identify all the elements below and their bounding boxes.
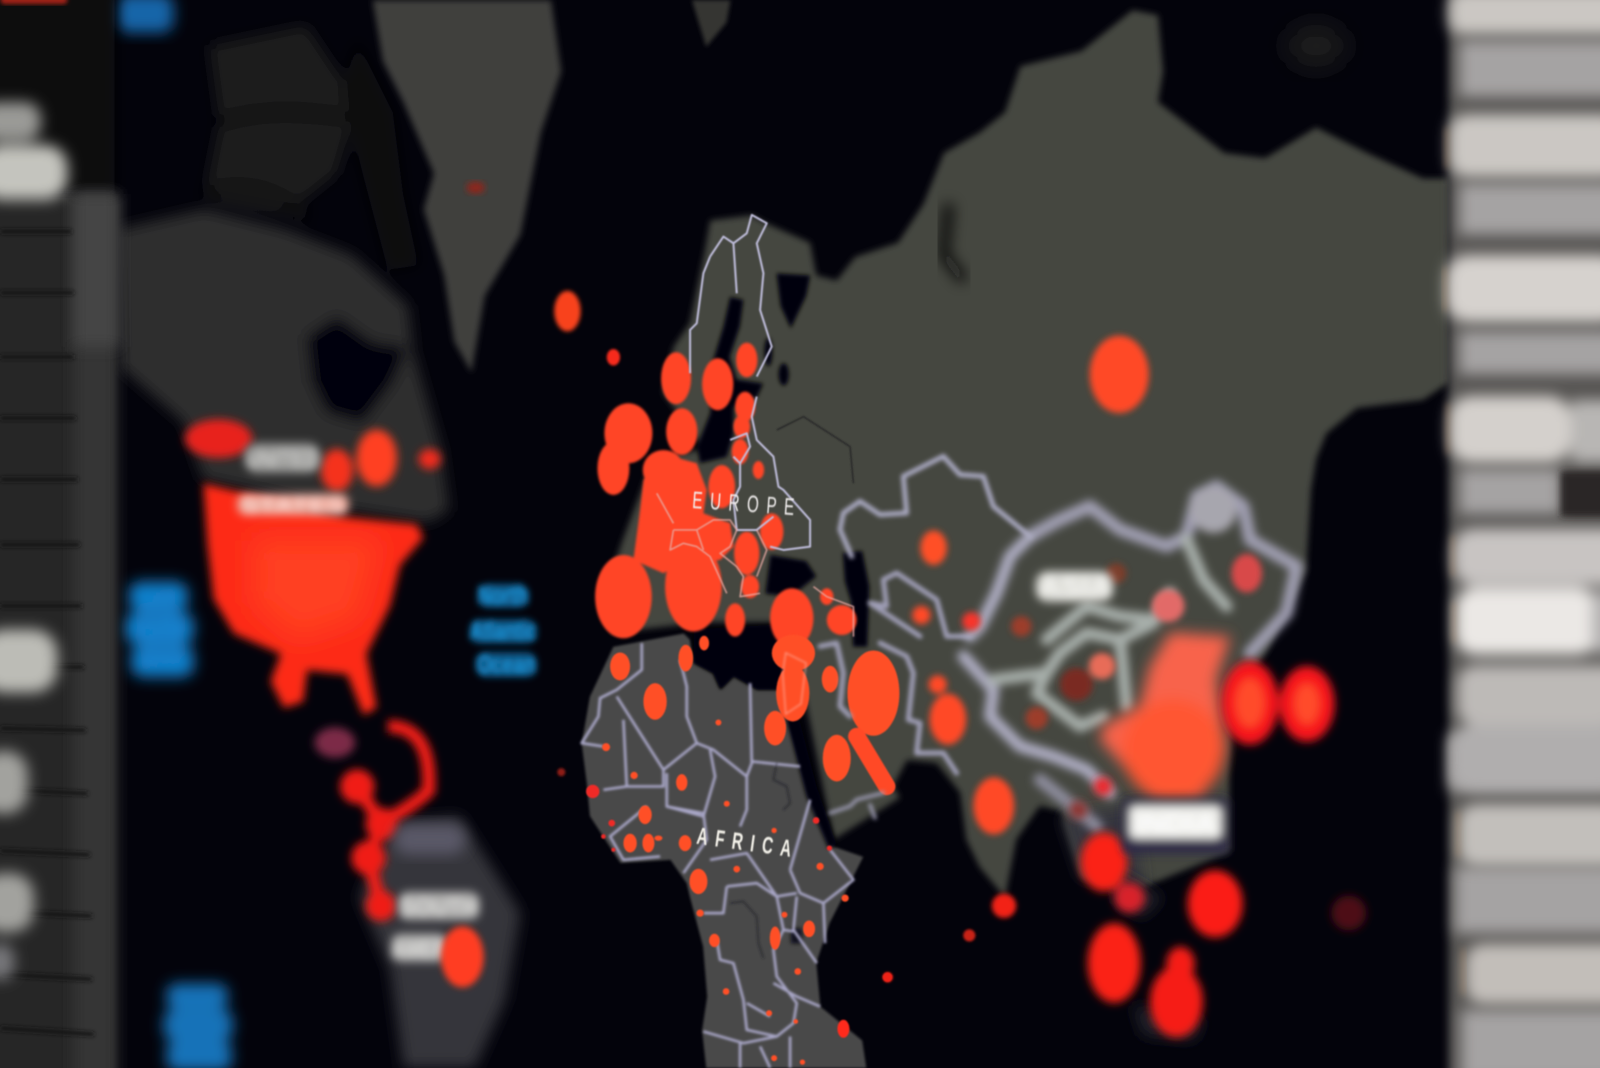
red case bubbles: north america — [185, 419, 441, 921]
red case bubbles: east and southeast asia — [1069, 661, 1366, 1037]
label: Atlantic Ocean in blue: Atlantic — [470, 618, 537, 646]
seas cut from the land — [694, 273, 869, 944]
blurred right rows, bright — [1446, 0, 1600, 1005]
faint bubble over greenland — [466, 182, 485, 194]
label: Atlantic Ocean in blue: Ocean — [477, 651, 536, 679]
red case bubbles: europe — [595, 343, 857, 648]
label: Europe: EUROPE — [691, 488, 803, 522]
red bubble: iceland — [554, 291, 581, 332]
label: Pacific Ocean in blue: North — [131, 580, 187, 610]
label: white tag over southeast asia — [1122, 798, 1229, 854]
label: Pacific Ocean in blue: Pacific — [125, 615, 192, 645]
land: africa — [582, 633, 866, 1068]
label: South America: AMER — [392, 936, 447, 963]
dark cut-out in right panel — [1561, 471, 1600, 516]
country borders: africa — [582, 643, 853, 1068]
list row lines — [0, 232, 94, 1034]
label: Atlantic Ocean in blue: North — [478, 582, 529, 610]
label: Atlantic Ocean in blue — [470, 582, 537, 679]
blurred right rows, dim — [1449, 41, 1600, 1068]
right panel: blurred data column — [1445, 0, 1600, 1068]
label: white tag over southeast asia: INDIA — [1135, 808, 1216, 838]
label: Africa: AFRICA — [695, 823, 801, 864]
label: Pacific Ocean in blue: Ocean — [133, 647, 192, 677]
red bubble: brazil — [441, 926, 484, 987]
red case bubbles: asia — [912, 336, 1262, 834]
land: south america — [359, 816, 521, 1068]
red case bubbles: africa and middle east — [586, 635, 899, 1065]
country borders: central asia, out of focus — [820, 456, 1030, 818]
label: Asia: ASIA — [1039, 572, 1112, 604]
label: United States — [237, 443, 349, 518]
label: Pacific Ocean in blue — [125, 580, 194, 677]
orange fringe on right rows — [1445, 128, 1463, 995]
land: scandinavia, russia and asia — [602, 10, 1449, 898]
blurred white list labels — [0, 102, 68, 980]
blue label top left — [117, 0, 174, 33]
china and indian borders, most blurred — [963, 486, 1297, 826]
label: United States: UNITED — [245, 446, 319, 473]
label: South America: SOUTH — [400, 894, 478, 921]
blue label bottom left — [163, 983, 233, 1068]
red case mass: china — [1100, 632, 1230, 801]
dark small bubbles: indian ocean — [557, 768, 1016, 982]
land: canada and north america, out of focus — [117, 26, 449, 522]
russian arctic inlet — [944, 204, 964, 281]
label: United States: STATES — [241, 493, 345, 518]
levant border ring — [783, 653, 806, 714]
label: South America — [391, 892, 480, 963]
red bubble at top left corner — [0, 0, 68, 4]
land: faint arctic island — [1286, 23, 1347, 68]
left panel: blurred list — [0, 0, 119, 1068]
lavender band over south america — [394, 824, 465, 855]
land: svalbard — [692, 0, 731, 47]
country borders: scandinavia and europe — [657, 215, 853, 637]
indochina — [1061, 806, 1143, 887]
malay and indonesian land — [1112, 867, 1204, 1040]
land: greenland — [373, 0, 561, 372]
